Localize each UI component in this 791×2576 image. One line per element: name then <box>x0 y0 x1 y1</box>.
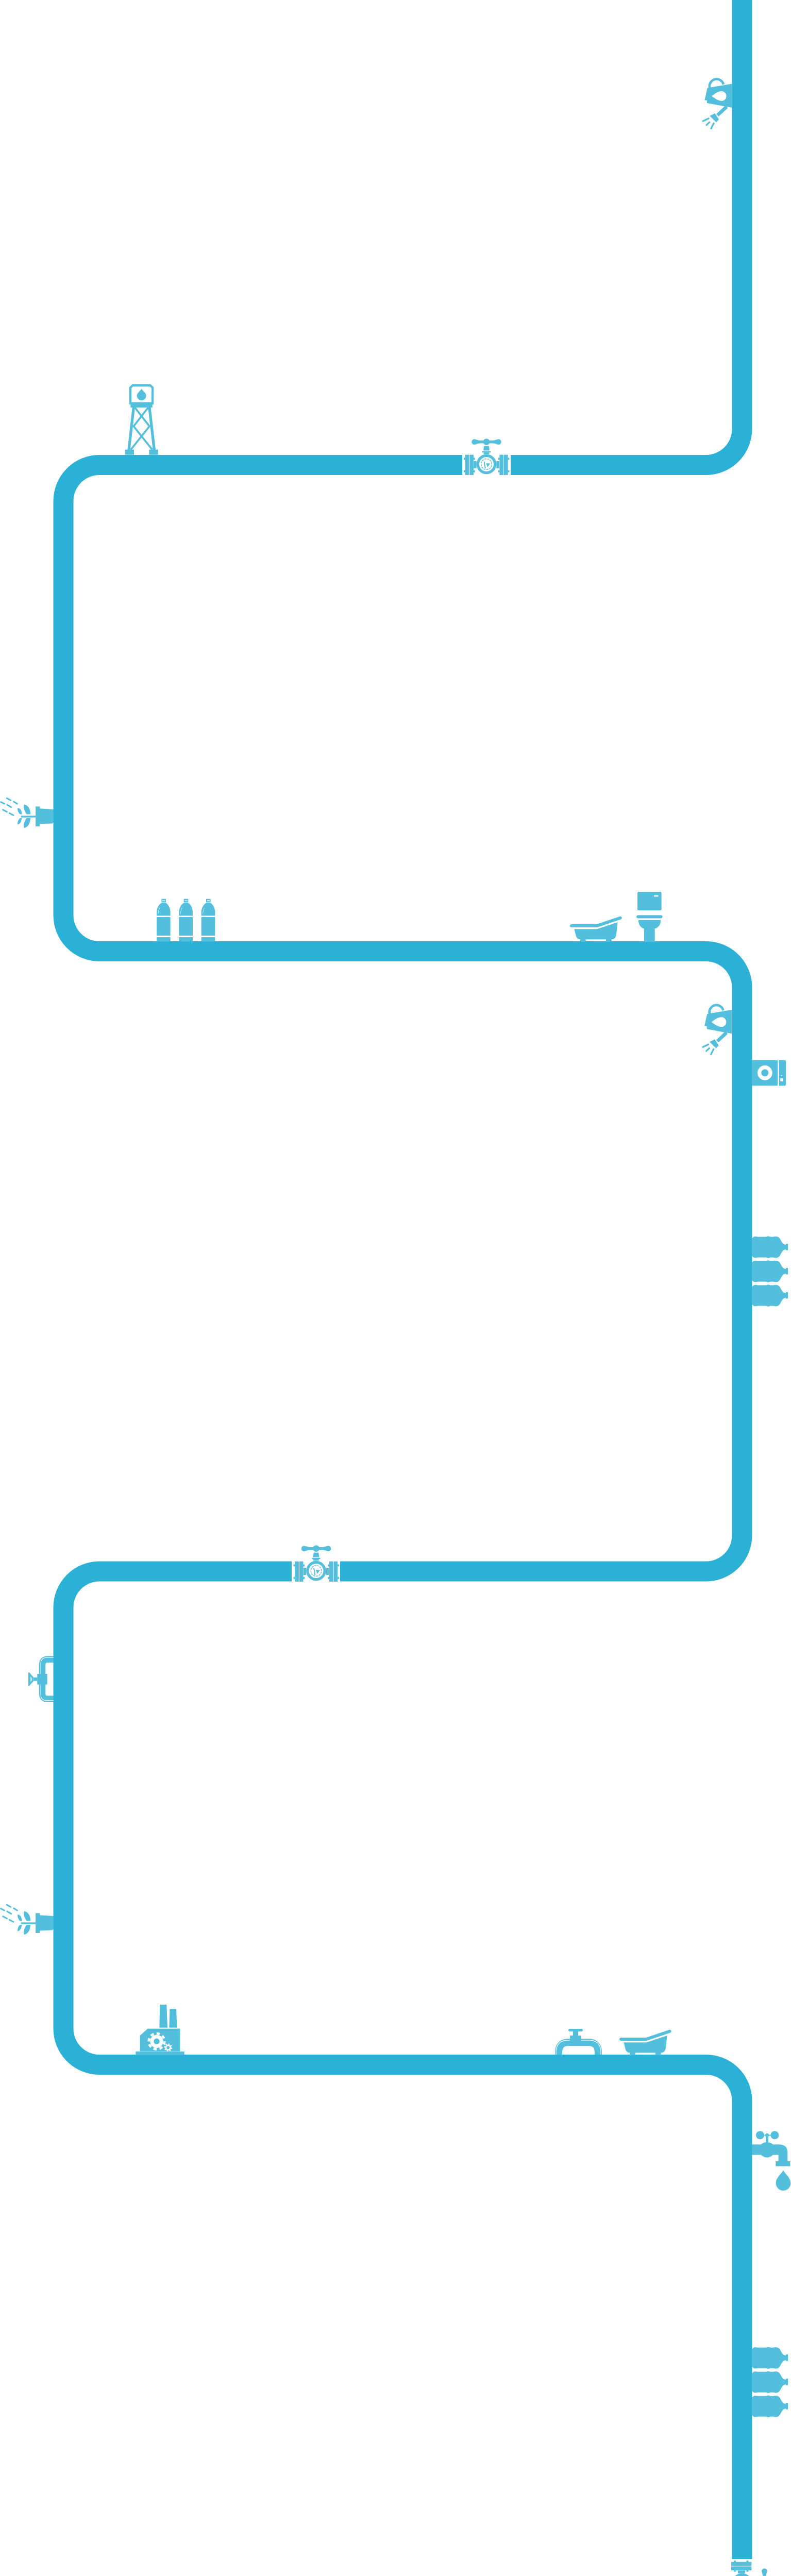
icon: valve on last vertical <box>731 2561 768 2576</box>
icon: spray nozzle upper <box>1 798 54 828</box>
icon: water jugs upper <box>752 1236 788 1307</box>
main pipe: top to first valve <box>511 0 742 465</box>
icon: water tower <box>125 384 158 455</box>
icon: bathtub upper <box>571 918 620 942</box>
icon: valve on third horizontal <box>294 1545 339 1582</box>
icon: clamp fitting <box>28 1657 54 1701</box>
icon: watering can top <box>703 79 732 128</box>
icon: valve on first horizontal <box>464 438 509 475</box>
icon: water jugs lower <box>752 2347 788 2417</box>
icon: three bottles <box>157 899 215 942</box>
icon: toilet <box>636 892 663 942</box>
icon: watering can middle <box>703 1005 732 1055</box>
icon: washing machine <box>752 1060 786 1086</box>
icon: spray nozzle lower <box>1 1905 54 1935</box>
icon: arched tap <box>556 2029 601 2055</box>
icon: bathtub lower <box>621 2031 670 2055</box>
main pipe: second valve to bottom valve <box>63 1571 742 2559</box>
main pipe: first valve through second valve <box>63 465 742 1571</box>
icon: factory <box>136 2005 184 2055</box>
icon: faucet with drop <box>752 2131 790 2191</box>
